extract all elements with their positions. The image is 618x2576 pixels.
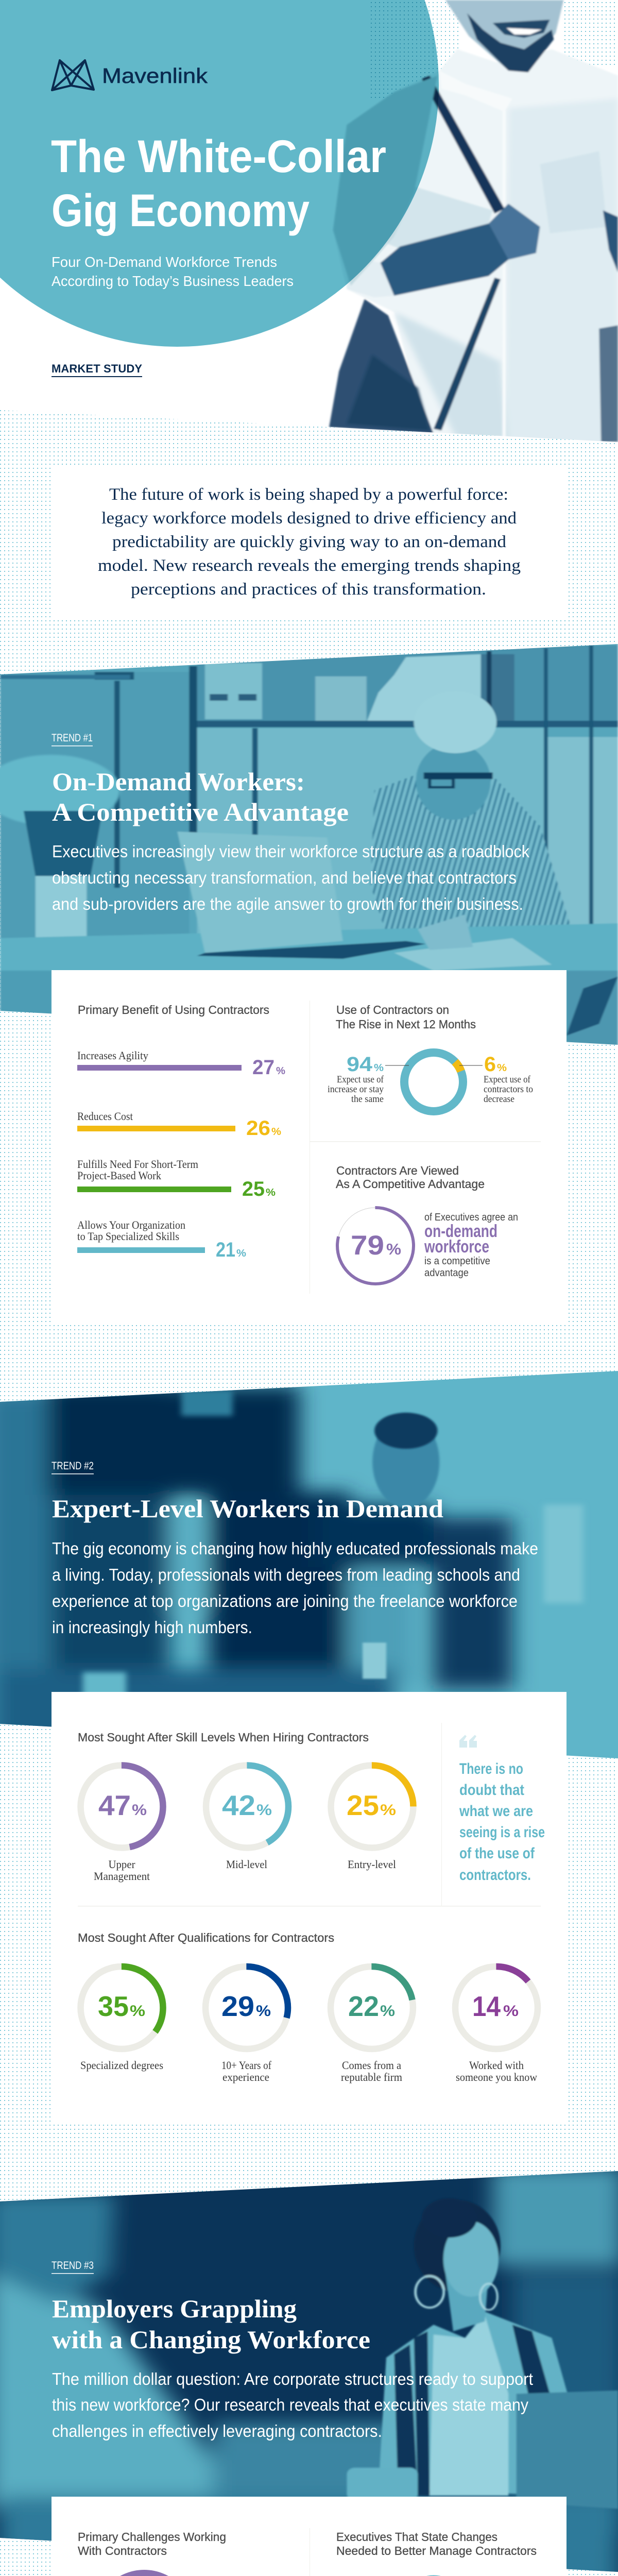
logo: Mavenlink [52,60,208,90]
bar chart: primary benefit of using contractors: % [276,1065,285,1077]
donut charts: skill levels: % [256,1802,272,1819]
ring stat: 79 percent competitive advantage: 79 [351,1230,384,1261]
donut charts: qualifications: Specialized degrees [80,2059,163,2072]
donut charts: qualifications: Worked with [469,2059,524,2072]
donut chart: changes needed: Executives That State Changes [336,2530,497,2544]
bar chart: primary benefit of using contractors: Project-Based Work [77,1169,161,1182]
heading: trend 2: TREND #2 [52,1460,94,1472]
donut charts: qualifications: 35 [98,1990,129,2022]
title: The White-Collar [51,130,386,182]
heading: trend 3 [52,2260,370,2354]
bar chart: primary benefit of using contractors: Fulfills Need For Short-Term [77,1158,198,1171]
donut charts: qualifications: Most Sought After Qualifications for Contractors [78,1931,334,1944]
donut charts: qualifications [78,1931,538,2083]
ring stat: 79 percent competitive advantage: is a competitive [424,1256,490,1267]
donut charts: skill levels: Most Sought After Skill Levels When Hiring Contractors [78,1731,369,1744]
text block: trend 1 body: Executives increasingly view their workforce structure as a roadblock [52,842,529,861]
ring stat: 79 percent competitive advantage: As A Competitive Advantage [336,1177,485,1191]
subtitle: Four On-Demand Workforce Trends [52,254,277,270]
heading: trend 3: TREND #3 [52,2260,94,2272]
bar chart: primary benefit of using contractors: 21 [216,1239,235,1261]
donut charts: skill levels: 47 [98,1789,131,1821]
donut charts: qualifications: % [503,2003,519,2020]
ring stat: 79 percent competitive advantage: Contractors Are Viewed [336,1164,459,1177]
donut chart: use of contractors on the rise: Use of Contractors on [336,1003,449,1016]
donut charts: qualifications: 14 [472,1990,501,2022]
logo wordmark: Mavenlink [102,64,208,88]
donut charts: skill levels: % [380,1802,396,1819]
text block: trend 1 body: obstructing necessary transformation, and believe that contractors [52,868,517,887]
bar chart: primary benefit of using contractors: 27 [252,1056,274,1079]
donut chart: use of contractors on the rise: increase or stay [328,1084,384,1095]
bar chart: primary benefit of using contractors: Allows Your Organization [77,1218,185,1231]
donut chart: use of contractors on the rise: contractors to [484,1084,533,1095]
heading: trend 1: TREND #1 [52,732,93,744]
heading: trend 1: A Competitive Advantage [52,798,349,826]
callout: quote on contractors: seeing is a rise [459,1824,545,1841]
panel: introduction [50,465,569,619]
donut chart: use of contractors on the rise: The Rise in Next 12 Months [336,1018,476,1031]
donut charts: skill levels: Management [94,1870,150,1883]
donut chart: use of contractors on the rise: % [497,1062,507,1074]
donut charts: skill levels [78,1731,413,1883]
bar chart: primary benefit of using contractors: Increases Agility [77,1049,148,1062]
donut charts: skill levels: % [132,1802,147,1819]
photo: woman at desk with laptop [0,634,618,1047]
donut charts: skill levels: 25 [347,1789,379,1821]
text block: trend 2 body: in increasingly high numbers. [52,1618,252,1637]
callout: quote on contractors: of the use of [459,1845,535,1862]
photo: man working at monitor [0,1357,618,1784]
text block: trend 3 body [52,2369,533,2441]
callout: quote on contractors: contractors. [459,1867,531,1884]
donut chart: use of contractors on the rise: the same [351,1094,384,1105]
callout: quote on contractors: There is no [459,1760,523,1777]
icon: Mavenlink mark [52,60,94,90]
subtitle: According to Today’s Business Leaders [52,273,294,289]
ring stat: 79 percent competitive advantage [336,1164,518,1284]
panel: introduction: predictability are quickly giving way to an on-demand [112,533,507,551]
panel: trend 1 charts [52,970,566,1324]
text block: trend 1 body: and sub-providers are the agile answer to growth for their business. [52,894,523,913]
panel: introduction: perceptions and practices of this transformation. [131,580,486,599]
panel: introduction: The future of work is being shaped by a powerful force: [109,485,508,504]
bar chart: primary benefit of using contractors [77,1003,285,1261]
panel: introduction: legacy workforce models designed to drive efficiency and [101,509,517,528]
bubble chart: primary challenges: With Contractors [78,2544,167,2557]
donut charts: skill levels: Upper [108,1858,135,1871]
heading: trend 3: with a Changing Workforce [52,2325,370,2354]
donut chart: use of contractors on the rise: 6 [484,1053,496,1076]
text block: trend 3 body: The million dollar question: Are corporate structures ready to support [52,2369,533,2388]
donut chart: use of contractors on the rise: % [374,1062,384,1074]
callout: quote on contractors [459,1735,545,1884]
title [51,130,386,236]
label: market study: MARKET STUDY [52,362,142,375]
text block: trend 2 body [52,1539,538,1637]
panel: teal hero circle [0,0,439,347]
callout: quote on contractors: doubt that [459,1782,524,1799]
bar chart: primary benefit of using contractors: Primary Benefit of Using Contractors [78,1003,269,1016]
ring stat: 79 percent competitive advantage: on-demand [424,1222,497,1241]
donut charts: qualifications: reputable firm [341,2071,402,2083]
donut chart: use of contractors on the rise: Expect use of [484,1074,531,1085]
heading: trend 3: Employers Grappling [52,2294,297,2323]
text block: trend 3 body: challenges in effectively leveraging contractors. [52,2421,382,2441]
ring stat: 79 percent competitive advantage: workforce [424,1237,489,1257]
icon: quotation mark [459,1735,477,1748]
donut charts: qualifications: 22 [348,1990,379,2022]
text block: trend 3 body: this new workforce? Our research reveals that executives state many [52,2395,528,2414]
ring stat: 79 percent competitive advantage: of Executives agree an [424,1212,518,1223]
donut charts: qualifications: experience [222,2071,269,2083]
bar chart: primary benefit of using contractors: % [266,1187,276,1198]
heading: trend 2 [52,1460,443,1523]
donut charts: qualifications: % [130,2003,145,2020]
heading: trend 1 [52,732,349,826]
donut charts: qualifications: 29 [221,1990,254,2022]
text block: trend 2 body: The gig economy is changing how highly educated professionals make [52,1539,538,1558]
title: Gig Economy [52,184,310,236]
bar chart: primary benefit of using contractors: Reduces Cost [77,1110,133,1123]
panel: trend 3 charts [52,2497,566,2576]
panel: introduction: model. New research reveals the emerging trends shaping [98,556,521,575]
bubble chart: primary challenges [78,2530,279,2576]
donut charts: skill levels: Mid-level [226,1858,267,1871]
donut chart: use of contractors on the rise [328,1003,533,1124]
callout: quote on contractors: what we are [459,1803,533,1820]
text block: trend 1 body [52,842,529,913]
donut charts: qualifications: % [380,2003,395,2020]
bar chart: primary benefit of using contractors: % [271,1126,281,1138]
donut charts: qualifications: 10+ Years of [221,2059,272,2072]
donut chart: use of contractors on the rise: decrease [484,1094,514,1105]
subtitle [52,254,294,289]
donut chart: changes needed: Needed to Better Manage Contractors [336,2544,537,2557]
donut chart: use of contractors on the rise: 94 [347,1053,373,1076]
donut chart: use of contractors on the rise: Expect use of [337,1074,384,1085]
heading: trend 2: Expert-Level Workers in Demand [52,1494,443,1523]
photo: woman in striped blazer [0,2157,618,2576]
bar chart: primary benefit of using contractors: % [236,1248,246,1259]
donut charts: skill levels: 42 [222,1789,255,1821]
ring stat: 79 percent competitive advantage: % [386,1240,401,1258]
donut charts: qualifications: Comes from a [342,2059,401,2072]
bubble chart: primary challenges: Primary Challenges Working [78,2530,226,2544]
text block: trend 2 body: experience at top organizations are joining the freelance workforce [52,1591,518,1611]
panel: trend 2 charts [52,1692,566,2124]
heading: trend 1: On-Demand Workers: [52,767,305,796]
donut charts: skill levels: Entry-level [348,1858,396,1871]
donut charts: qualifications: someone you know [456,2071,537,2083]
text block: trend 2 body: a living. Today, professionals with degrees from leading schools and [52,1565,520,1584]
donut chart: changes needed [329,2530,537,2576]
bar chart: primary benefit of using contractors: 26 [246,1117,270,1140]
photo: smiling man with shoulder bag [329,0,618,460]
donut charts: qualifications: % [256,2003,271,2020]
ring stat: 79 percent competitive advantage: advantage [424,1267,469,1279]
bar chart: primary benefit of using contractors: to Tap Specialized Skills [77,1230,179,1243]
bar chart: primary benefit of using contractors: 25 [242,1178,265,1200]
